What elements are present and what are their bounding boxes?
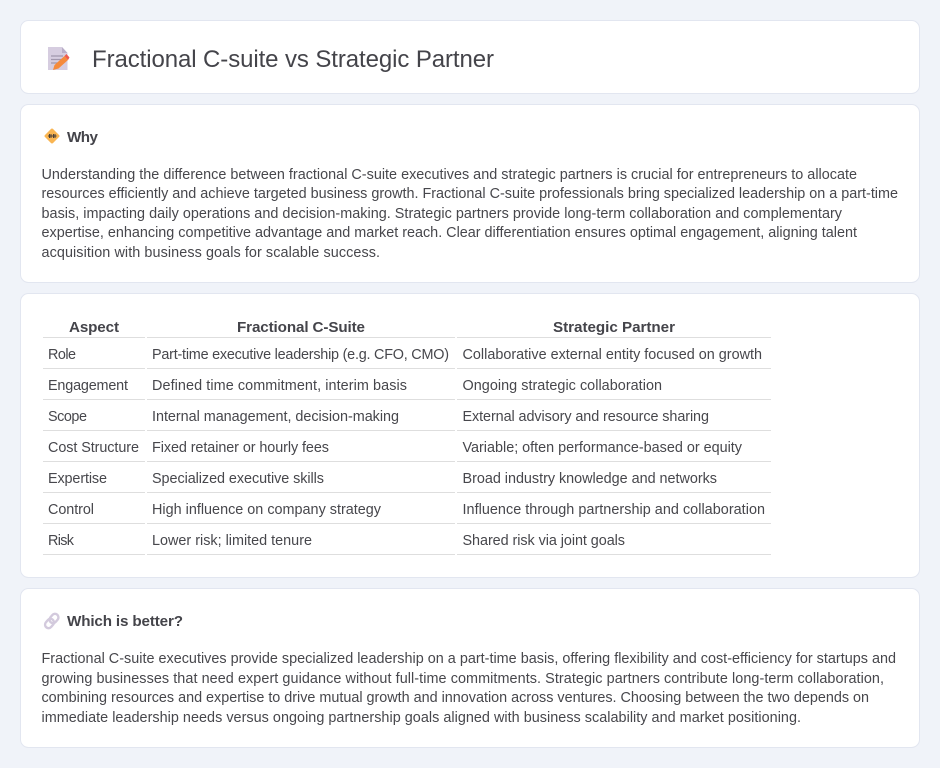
table row: engagement: Ongoing strategic collaboration [462,378,662,394]
table row: control: High influence on company strategy [152,502,382,518]
table row: risk: Lower risk; limited tenure [152,533,312,549]
table row: expertise: Broad industry knowledge and networks [462,471,717,487]
text block: why: acquisition with business goals for scalable success. [42,245,380,261]
table header: Aspect [69,319,119,336]
table row: scope: Internal management, decision-making [152,409,399,425]
table row: risk [48,533,625,549]
table row: role: Role [48,347,76,363]
text block: why: expertise, enhancing competitive advantage and market reach. Clear differentiation ensures optimal engagement, aligning talent [42,225,857,241]
table row: scope: External advisory and resource sharing [462,409,709,425]
text block: which is better: combining resources and expertise to drive mutual growth and innovation across ventures. Choosing between the two depends on [42,690,869,706]
table row: engagement: Defined time commitment, interim basis [152,378,407,394]
heading: why: Why [67,129,99,146]
table row: risk: Risk [48,533,75,549]
table row: control: Influence through partnership and collaboration [462,502,765,518]
heading: which is better: Which is better? [67,613,183,630]
text block: which is better [42,651,896,726]
text block: why: resources efficiently and achieve targeted business growth. Fractional C-suite professionals bring specialized leadership on a part-time [42,186,898,202]
table row: cost structure [48,440,743,456]
table header [69,319,675,336]
text block: which is better: immediate leadership needs versus ongoing partnership goals aligned with business scalability and market positioning. [42,710,801,726]
text block: why: Understanding the difference between fractional C-suite executives and strategic partners is crucial for entrepreneurs to allocate [42,167,857,183]
text block: why [42,167,898,261]
table row: risk: Shared risk via joint goals [462,533,625,549]
table row: expertise: Specialized executive skills [152,471,324,487]
panel: comparison table [20,294,920,578]
table row: scope [48,409,709,425]
table row: cost structure: Variable; often performance-based or equity [462,440,743,456]
text block: which is better: growing businesses that need expert guidance without full-time commitments. Strategic partners contribute long-term collaboration, [42,671,884,687]
table row: expertise [48,471,717,487]
table row: engagement [48,378,662,394]
table row: control [48,502,765,518]
panel: which is better [20,588,920,748]
table row: cost structure: Fixed retainer or hourly fees [152,440,329,456]
text block: why: basis, impacting daily operations and decision-making. Strategic partners provide long-term collaboration and complementary [42,206,843,222]
panel: title header [20,20,920,94]
table row: role: Part-time executive leadership (e.g. CFO, CMO) [152,347,449,363]
table header: Strategic Partner [553,319,675,336]
text block: which is better: Fractional C-suite executives provide specialized leadership on a part-time basis, offering flexibility and cost-efficiency for startups and [42,651,896,667]
table row: scope: Scope [48,409,87,425]
title: Fractional C-suite vs Strategic Partner [92,46,494,73]
table row: cost structure: Cost Structure [48,440,139,456]
table row: engagement: Engagement [48,378,128,394]
table header: Fractional C-Suite [237,319,365,336]
table row: expertise: Expertise [48,471,107,487]
icon: chain link [44,612,60,630]
panel: why [20,104,920,282]
table row: role [48,347,762,363]
icon: orange diamond sign [44,128,60,144]
icon: memo with pencil [48,47,70,70]
table row: control: Control [48,502,94,518]
table row: role: Collaborative external entity focused on growth [462,347,762,363]
